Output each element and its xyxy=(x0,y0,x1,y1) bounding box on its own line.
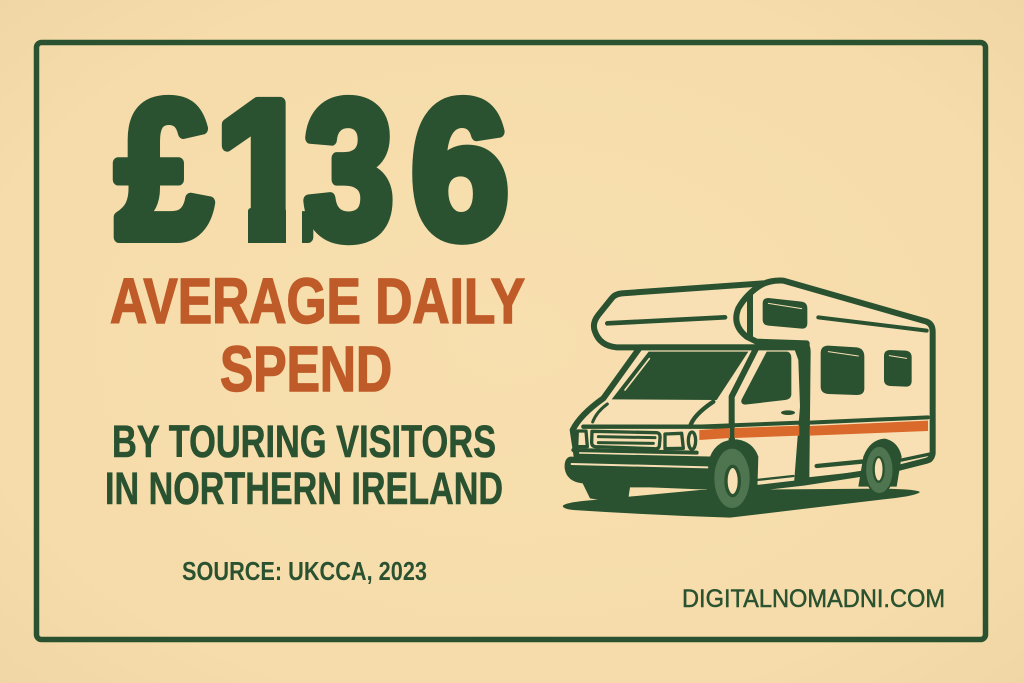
headline number: £136: 1 xyxy=(215,61,313,279)
front bumper xyxy=(565,457,717,500)
side window small xyxy=(884,350,912,387)
rear living body xyxy=(730,281,933,488)
heading: average daily spend: AVERAGE DAILY xyxy=(110,265,525,337)
heading: average daily spend xyxy=(110,265,525,405)
source note: SOURCE: UKCCA, 2023 xyxy=(182,556,427,586)
headline number: £136: 6 xyxy=(411,61,509,279)
front wheel xyxy=(713,448,751,509)
sill lines xyxy=(817,461,865,466)
door frame xyxy=(732,347,757,440)
door pillar xyxy=(792,342,811,483)
headline number: £136 xyxy=(116,61,509,279)
heading: average daily spend: SPEND xyxy=(220,333,392,405)
icon: motorhome illustration xyxy=(563,281,933,518)
windscreen xyxy=(612,352,748,400)
headlights xyxy=(665,433,683,449)
roof side trim line xyxy=(818,317,927,331)
subheading: by touring visitors in Northern Ireland: BY TOURING VISITORS xyxy=(112,416,496,467)
overhead cab window xyxy=(763,298,807,329)
lower cab line xyxy=(573,450,697,453)
cab front and bonnet xyxy=(573,347,757,460)
headline number: £136: £ xyxy=(116,61,212,278)
grille xyxy=(592,431,660,449)
windscreen highlight xyxy=(625,359,649,390)
bonnet crease xyxy=(690,402,713,427)
website credit: DIGITALNOMADNI.COM xyxy=(682,585,945,613)
ground shadow xyxy=(563,489,920,518)
stripe top line xyxy=(698,417,928,427)
door window xyxy=(741,352,791,405)
over-cab trim line xyxy=(607,317,725,323)
rear wheel xyxy=(865,446,893,494)
subheading: by touring visitors in Northern Ireland: IN NORTHERN IRELAND xyxy=(105,463,503,514)
front wheel arch xyxy=(707,439,758,490)
rear wheel arch xyxy=(858,439,902,487)
orange stripe xyxy=(699,421,928,440)
over-cab roof xyxy=(594,283,807,347)
side window large xyxy=(821,346,864,395)
door handle xyxy=(781,410,795,415)
subheading: by touring visitors in Northern Ireland xyxy=(105,416,503,514)
headline number: £136: 3 xyxy=(305,61,393,279)
